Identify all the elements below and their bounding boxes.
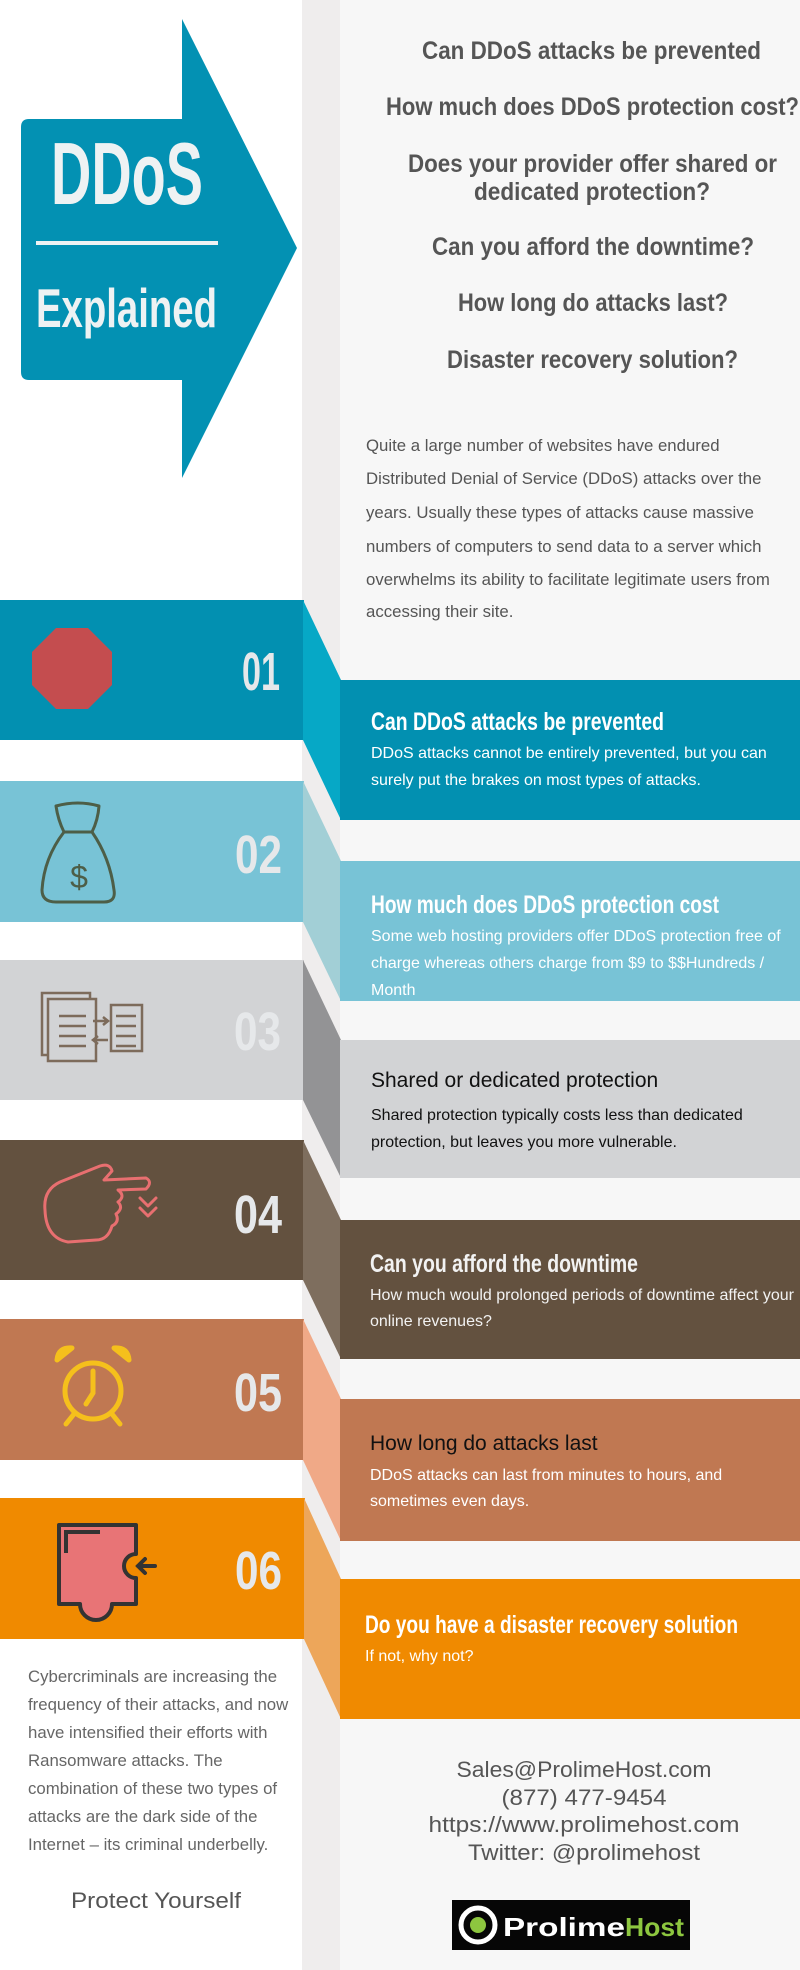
questions list: dedicated protection?: [474, 178, 710, 206]
step 05 band: DDoS attacks can last from minutes to hours, and: [370, 1467, 722, 1484]
intro paragraph: Quite a large number of websites have endured: [366, 436, 720, 455]
logo: ProlimeHost: [452, 1900, 690, 1950]
questions list: Disaster recovery solution?: [447, 346, 738, 374]
step 03 band: Shared or dedicated protection: [371, 1069, 658, 1092]
step 06 band: If not, why not?: [365, 1648, 474, 1665]
logo: ProlimeHost: Prolime: [503, 1912, 625, 1942]
step 02 band: $: [70, 859, 88, 895]
contact info: Sales@ProlimeHost.com: [456, 1757, 712, 1782]
closing paragraph: Cybercriminals are increasing the: [28, 1667, 277, 1686]
closing paragraph: Internet – its criminal underbelly.: [28, 1835, 268, 1854]
intro paragraph: Distributed Denial of Service (DDoS) attacks over the: [366, 469, 761, 488]
title arrow: DDoS Explained: [21, 19, 297, 478]
step 04 band: 04: [234, 1185, 282, 1245]
icon: pointing hand: [45, 1165, 156, 1242]
questions list: [386, 37, 799, 374]
logo: ProlimeHost: Host: [625, 1912, 684, 1942]
step 05 band: [0, 1319, 800, 1541]
step 01 band: DDoS attacks cannot be entirely prevented, but you can: [371, 745, 767, 762]
step 05 band: 05: [234, 1363, 282, 1423]
step 03 band: 03: [234, 1002, 281, 1062]
icon: stop octagon: [32, 628, 112, 709]
intro paragraph: numbers of computers to send data to a server which: [366, 537, 762, 556]
questions list: Can you afford the downtime?: [432, 233, 754, 261]
step 06 band: [0, 1498, 800, 1719]
questions list: Can DDoS attacks be prevented: [422, 37, 761, 65]
step 04 band: online revenues?: [370, 1313, 492, 1330]
intro paragraph: overwhelms its ability to facilitate legitimate users from: [366, 570, 770, 589]
title arrow: DDoS Explained: DDoS: [51, 124, 203, 223]
step 01 band: Can DDoS attacks be prevented: [371, 708, 664, 736]
icon: puzzle piece: [59, 1525, 155, 1620]
icon: alarm clock: [65, 1363, 121, 1424]
step 03 band: Shared protection typically costs less than dedicated: [371, 1107, 743, 1124]
step 01 band: [0, 600, 800, 820]
step 04 band: [0, 1140, 800, 1359]
step 02 band: charge whereas others charge from $9 to $$Hundreds /: [371, 955, 765, 972]
intro paragraph: [366, 436, 770, 621]
step 02 band: Some web hosting providers offer DDoS protection free of: [371, 928, 781, 945]
step 04 band: How much would prolonged periods of downtime affect your: [370, 1287, 795, 1304]
intro paragraph: years. Usually these types of attacks cause massive: [366, 503, 754, 522]
closing paragraph: attacks are the dark side of the: [28, 1807, 257, 1826]
step 05 band: How long do attacks last: [370, 1432, 598, 1455]
icon: documents exchange: [42, 993, 142, 1061]
step 05 band: sometimes even days.: [370, 1493, 529, 1510]
protect yourself: Protect Yourself: [71, 1888, 242, 1913]
contact info: [428, 1757, 740, 1865]
step 01 band: 01: [242, 642, 280, 702]
contact info: (877) 477-9454: [502, 1785, 666, 1810]
closing paragraph: combination of these two types of: [28, 1779, 277, 1798]
contact info: Twitter: @prolimehost: [468, 1840, 700, 1865]
contact info: https://www.prolimehost.com: [428, 1812, 740, 1837]
step 03 band: [0, 960, 800, 1178]
step 02 band: Month: [371, 982, 415, 999]
closing paragraph: Ransomware attacks. The: [28, 1751, 223, 1770]
step 04 band: Can you afford the downtime: [370, 1250, 638, 1278]
step 03 band: protection, but leaves you more vulnerable.: [371, 1134, 677, 1151]
step 02 band: 02: [235, 825, 282, 885]
intro paragraph: accessing their site.: [366, 602, 513, 621]
icon: money bag: [42, 803, 114, 902]
title arrow: DDoS Explained: Explained: [36, 277, 217, 339]
closing paragraph: frequency of their attacks, and now: [28, 1695, 289, 1714]
closing paragraph: [28, 1667, 289, 1854]
step 01 band: surely put the brakes on most types of attacks.: [371, 772, 701, 789]
step 06 band: 06: [235, 1541, 282, 1601]
closing paragraph: have intensified their efforts with: [28, 1723, 267, 1742]
step 02 band: [0, 781, 800, 1001]
questions list: How long do attacks last?: [458, 289, 728, 317]
